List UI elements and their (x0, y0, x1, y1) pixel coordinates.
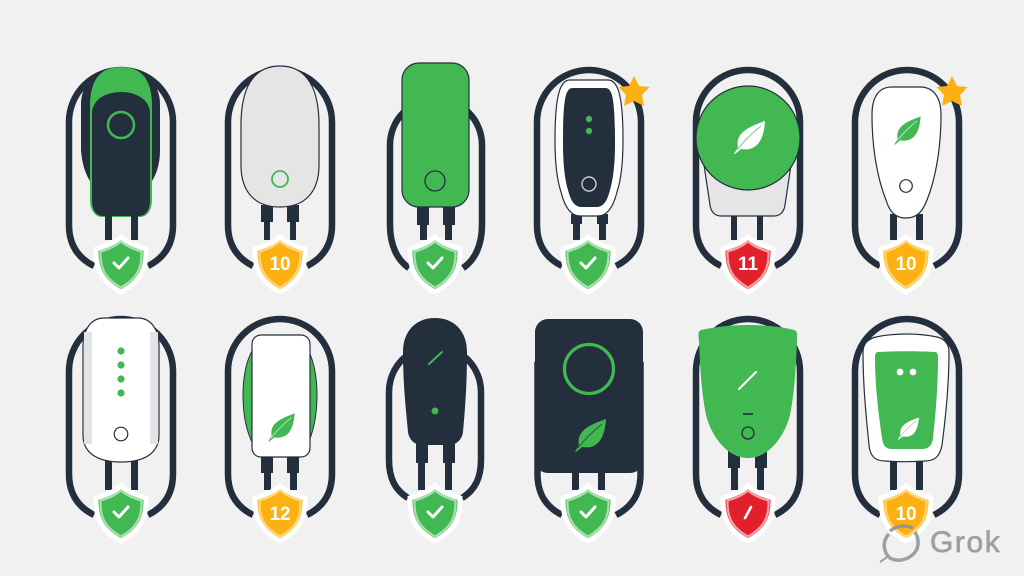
charger body (402, 63, 469, 207)
cables (890, 214, 923, 240)
shield: 12: 12 (269, 504, 291, 525)
cable loop (228, 319, 332, 515)
charger body (555, 80, 623, 216)
cable loop (855, 319, 959, 515)
charger body (243, 335, 317, 457)
cable loop (69, 70, 173, 266)
cable loop (696, 319, 800, 515)
icon: leaf (898, 417, 919, 440)
charger body (241, 66, 319, 207)
cables (572, 470, 605, 490)
cables (890, 460, 923, 490)
shield: check (563, 237, 613, 292)
charger body (863, 334, 949, 462)
shield: check (410, 237, 460, 292)
cable loop (696, 70, 800, 266)
charger body (698, 325, 797, 458)
icon: leaf (575, 419, 606, 452)
cable loop (855, 70, 959, 266)
cable loop (537, 70, 641, 266)
shield: 12 (255, 486, 305, 541)
charger 8: white unit with green sides (228, 319, 332, 541)
charger 10: large dark unit (535, 319, 643, 541)
cable loop (69, 319, 173, 515)
charger 11: green shield-shaped unit (696, 319, 800, 541)
charger body (83, 318, 159, 462)
icon: leaf (894, 117, 921, 145)
watermark: Grok (880, 526, 1001, 562)
charger body (403, 318, 467, 445)
cables (105, 216, 138, 240)
icon: Grok logo (880, 526, 918, 562)
charger body (696, 86, 800, 216)
icon: star (936, 76, 968, 106)
charger body (535, 319, 643, 473)
charger 2: grey egg unit (228, 66, 332, 292)
cable loop (538, 365, 640, 515)
charger 3: green rounded unit (390, 63, 482, 292)
charger 1: dark unit with green cap (69, 67, 173, 292)
cables (728, 450, 767, 490)
shield: slash (723, 486, 773, 541)
shield: 10: 10 (895, 254, 917, 275)
charger 5: green disc unit (696, 70, 800, 292)
charger 12: white frame with green panel (855, 319, 959, 541)
shield: check (96, 237, 146, 292)
charger body (81, 67, 160, 217)
charger 7: white unit with four dots (69, 318, 173, 541)
cables (261, 205, 299, 240)
cable loop (389, 346, 481, 498)
cable loop (228, 70, 332, 266)
icon: leaf (268, 414, 295, 442)
shield: 10 (881, 486, 931, 541)
shield: check (96, 486, 146, 541)
cables (417, 205, 455, 240)
shield: 11 (723, 237, 773, 292)
shield: check (563, 486, 613, 541)
shield: check (410, 486, 460, 541)
charger body (872, 87, 941, 218)
watermark text: Grok (930, 526, 1001, 559)
shield: 10 (881, 237, 931, 292)
charger 9: dark tapered unit (389, 318, 481, 541)
cables (105, 460, 138, 490)
cables (261, 455, 299, 490)
shield: 11: 11 (738, 254, 758, 275)
charger 6: white teardrop unit with star (855, 70, 968, 292)
icon: star (618, 76, 650, 106)
charger 4: white frame dark unit with star (537, 70, 650, 292)
cables (416, 443, 455, 490)
cable loop (390, 99, 482, 268)
icon: leaf (734, 121, 765, 154)
shield: 10: 10 (895, 504, 917, 525)
shield: 10 (255, 237, 305, 292)
cables (731, 214, 763, 240)
cables (571, 214, 608, 240)
shield: 10: 10 (269, 254, 291, 275)
